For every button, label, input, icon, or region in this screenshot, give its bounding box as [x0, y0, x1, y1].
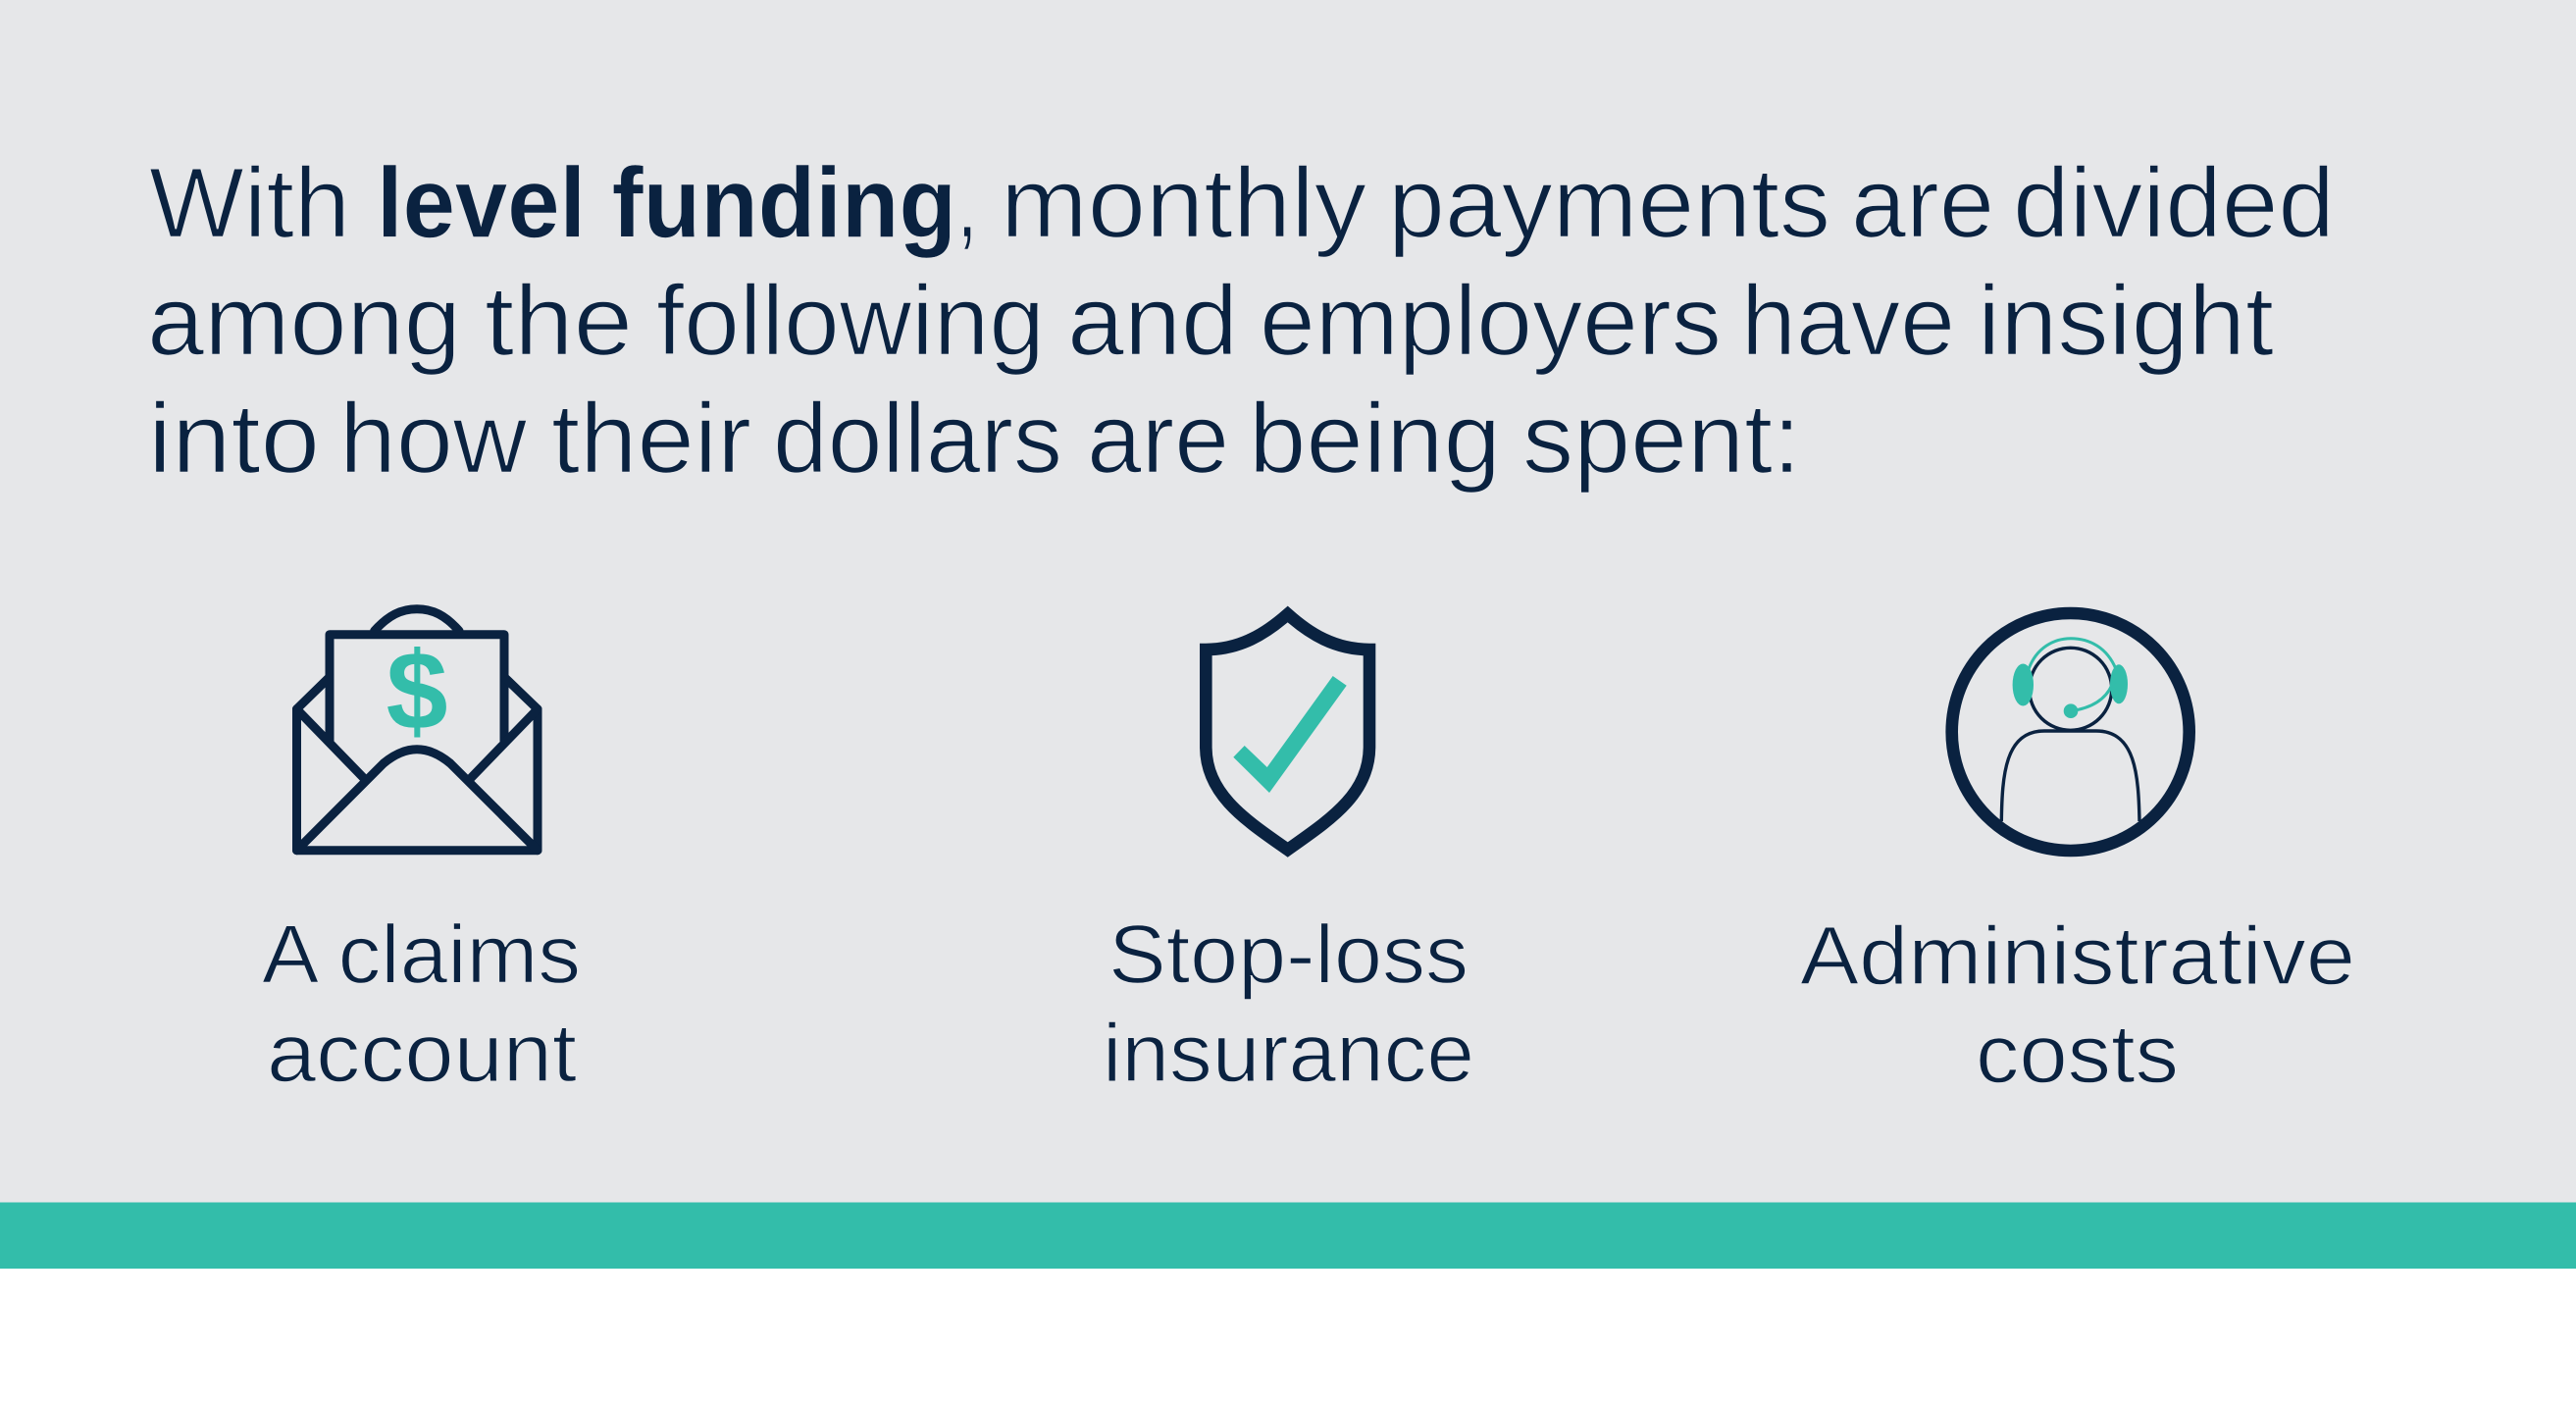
- heading: how: [339, 385, 528, 494]
- icon: envelope with dollar: $: [386, 629, 447, 753]
- label: Stop-loss insurance: Stop-loss: [1108, 909, 1468, 1001]
- heading: among: [147, 267, 461, 377]
- heading: have: [1741, 267, 1955, 377]
- heading: following: [656, 267, 1045, 377]
- item: claims account: [262, 609, 581, 1099]
- label: A claims account: [262, 909, 581, 1099]
- heading: are: [1087, 385, 1229, 494]
- heading: the: [485, 267, 633, 377]
- heading: [147, 149, 2335, 494]
- teal footer band: [0, 1203, 2576, 1269]
- label: A claims account: account: [267, 1007, 577, 1099]
- label: Administrative costs: Administrative: [1800, 910, 2355, 1002]
- heading: employers: [1260, 267, 1722, 377]
- heading: level funding: [377, 149, 956, 259]
- heading: being: [1249, 385, 1501, 494]
- heading: payments: [1388, 149, 1830, 259]
- heading: dollars: [773, 385, 1062, 494]
- label: A claims account: A claims: [262, 909, 581, 1001]
- heading: are: [1851, 149, 1994, 259]
- heading: ,: [956, 149, 978, 259]
- icon: shield with check: [1206, 614, 1369, 850]
- heading: into: [148, 385, 320, 494]
- heading: and: [1067, 267, 1238, 377]
- label: Stop-loss insurance: [1103, 909, 1474, 1099]
- item: stop-loss insurance: [1103, 614, 1474, 1099]
- heading: With: [149, 149, 350, 259]
- heading: spent:: [1522, 385, 1801, 494]
- item: administrative costs: [1800, 613, 2355, 1100]
- icon: person with headset: [1952, 613, 2190, 851]
- heading: monthly: [1001, 149, 1367, 259]
- label: Administrative costs: [1800, 910, 2355, 1100]
- heading: insight: [1978, 267, 2274, 377]
- heading: divided: [2013, 149, 2335, 259]
- label: Stop-loss insurance: insurance: [1103, 1007, 1474, 1099]
- label: Administrative costs: costs: [1976, 1008, 2179, 1100]
- heading: their: [551, 385, 751, 494]
- icon: envelope with dollar: [296, 609, 538, 851]
